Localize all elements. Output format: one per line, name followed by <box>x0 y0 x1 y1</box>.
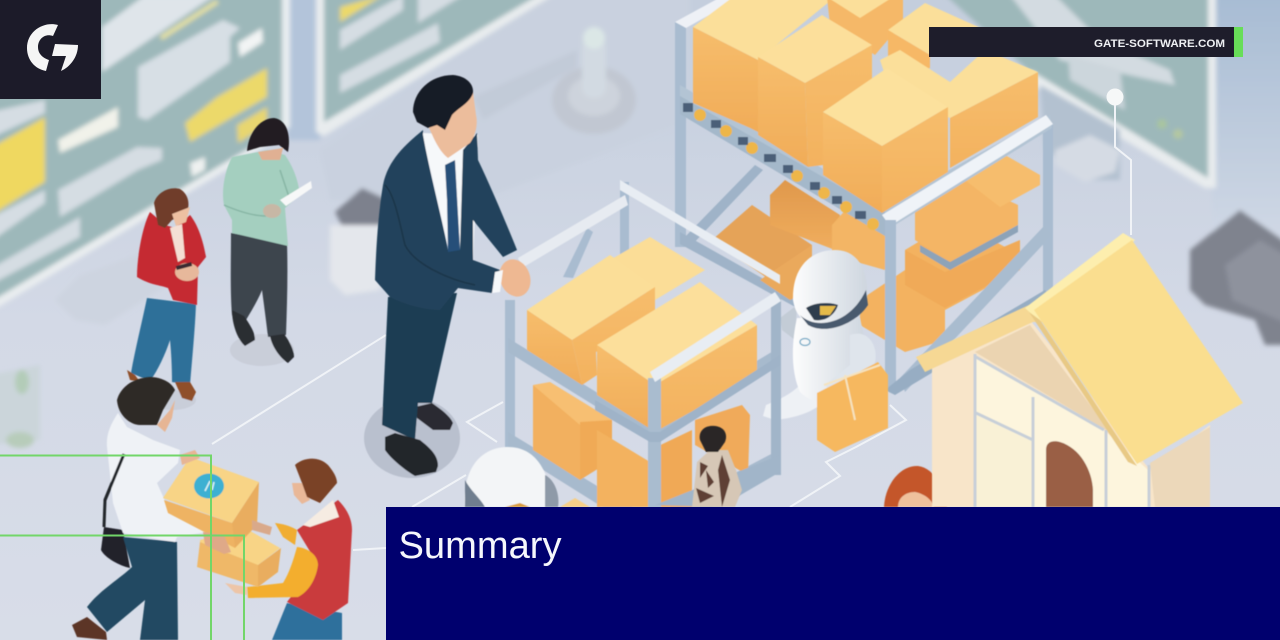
roof fascia <box>916 305 1045 372</box>
face <box>172 207 190 226</box>
summary heading: Summary <box>398 525 562 567</box>
robot visor <box>800 290 868 329</box>
rack back frame <box>675 0 1053 315</box>
person: woman in red jacket <box>127 188 206 410</box>
house right wall <box>1150 427 1210 507</box>
shoe <box>72 617 107 640</box>
trousers <box>382 293 457 440</box>
person: man in suit <box>364 75 536 478</box>
box: front large <box>823 68 948 213</box>
face <box>292 483 310 504</box>
jacket <box>137 212 206 305</box>
hair <box>247 118 289 152</box>
face <box>157 400 175 432</box>
shirt <box>223 150 300 246</box>
hair <box>154 188 188 228</box>
second wall screen <box>316 0 552 136</box>
inner top <box>170 224 185 262</box>
background shelf and lamp <box>473 27 636 134</box>
hands and paper <box>263 181 312 218</box>
house walls <box>932 320 1210 507</box>
cart back frame <box>505 180 780 475</box>
left wall screen <box>0 0 290 312</box>
hair <box>413 75 473 130</box>
box: tall centre <box>758 15 872 167</box>
background grey chair <box>1190 210 1280 345</box>
logo block <box>0 0 101 99</box>
jeans <box>131 298 196 385</box>
red haired woman <box>884 466 947 507</box>
window glass <box>975 354 1149 507</box>
tie <box>445 160 460 252</box>
shoes <box>232 310 294 363</box>
robot chest mark <box>800 338 810 346</box>
satchel <box>101 527 130 568</box>
robot arm <box>825 334 876 395</box>
cart upper box one <box>527 255 655 385</box>
site name: GATE-SOFTWARE.COM <box>1094 38 1225 50</box>
green outline rectangle one <box>0 456 211 640</box>
jacket <box>375 130 517 310</box>
roof surface <box>1034 240 1243 464</box>
logo mark <box>27 24 78 71</box>
site name bar <box>929 27 1243 57</box>
roof side underside <box>1029 312 1137 466</box>
bag strap <box>104 451 148 527</box>
box: back right <box>827 0 985 75</box>
lower sleeve <box>247 547 318 598</box>
cart lower box two <box>597 405 750 507</box>
boots <box>127 370 196 401</box>
cart upper back box <box>610 237 705 300</box>
trousers <box>87 537 178 640</box>
jeans <box>272 603 342 640</box>
box: right wide <box>880 50 1038 168</box>
background desk <box>55 245 205 325</box>
robot with box <box>763 250 888 452</box>
hands on rail <box>492 255 536 301</box>
cart lower box one <box>533 382 612 480</box>
lower boxes inside rack <box>712 155 1040 352</box>
large rack with boxes <box>675 0 1053 395</box>
robot head <box>793 250 867 326</box>
phone and hands <box>175 262 199 281</box>
cart rack with boxes <box>505 180 781 540</box>
house gable shade <box>975 325 1135 465</box>
person: man in red vest <box>247 459 352 640</box>
vest <box>287 500 352 620</box>
cart front posts <box>595 292 781 508</box>
upper carried box with blue label <box>163 450 272 554</box>
person: man in white shirt with satchel <box>72 377 207 640</box>
collar <box>303 500 339 527</box>
head <box>258 148 283 160</box>
lower carried box <box>197 528 281 595</box>
shirt <box>422 133 478 262</box>
jacket folds <box>385 185 475 285</box>
floor guide lines <box>212 104 1131 550</box>
house with yellow roof <box>916 233 1243 507</box>
background green plant <box>0 365 40 448</box>
robot leg <box>763 385 825 420</box>
blue label <box>194 474 224 498</box>
person: woman in green shirt <box>223 118 312 366</box>
cart upper box two <box>597 282 757 432</box>
top shelf deck <box>680 85 1053 395</box>
shirt <box>107 413 207 542</box>
robot body <box>793 318 866 403</box>
box: back left <box>693 0 835 132</box>
right wall screen <box>940 0 1216 188</box>
background console <box>330 188 388 295</box>
network node dot <box>1106 88 1124 106</box>
roof top edge <box>1025 233 1135 322</box>
hand under box <box>225 583 247 595</box>
carried box <box>817 362 888 452</box>
summary panel <box>386 507 1280 640</box>
robot far arm <box>780 305 797 340</box>
trousers <box>231 233 287 337</box>
face <box>428 92 477 158</box>
hair <box>295 459 337 503</box>
background monitor <box>1040 85 1120 180</box>
sleeve shade <box>224 170 290 216</box>
blurred background: screens and equipment <box>0 0 1280 448</box>
second robot head <box>465 447 590 507</box>
door <box>1046 441 1093 507</box>
upper sleeve <box>275 523 297 545</box>
strap over shoulder <box>105 454 124 500</box>
green outline rectangle two <box>0 536 244 640</box>
hair <box>117 377 175 425</box>
back shoe <box>415 403 453 430</box>
child figure <box>692 426 742 507</box>
front shoe <box>385 433 438 476</box>
hands on box <box>203 532 231 554</box>
cart shelf decks <box>508 338 778 540</box>
